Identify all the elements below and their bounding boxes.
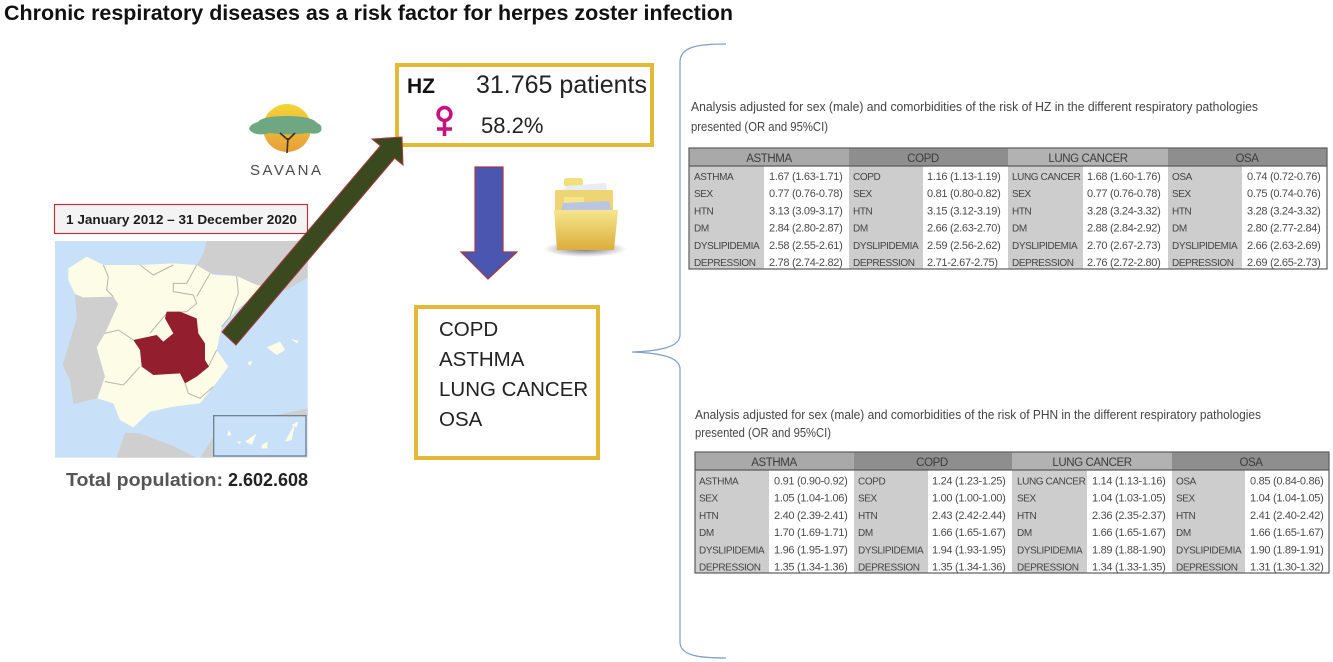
table: HZ risk: 3.28 (3.24-3.32): [1247, 206, 1320, 218]
table: HZ risk: ASTHMA: [694, 172, 734, 183]
table: HZ risk: DEPRESSION: [1172, 258, 1234, 269]
table: HZ risk: 0.75 (0.74-0.76): [1247, 188, 1320, 200]
table: HZ risk: 2.66 (2.63-2.69): [1247, 240, 1320, 252]
table: PHN risk: DYSLIPIDEMIA: [858, 546, 924, 556]
table: PHN risk: [695, 452, 1329, 574]
table: PHN risk: 1.35 (1.34-1.36): [774, 562, 847, 574]
text: total population: [66, 470, 308, 490]
title: Chronic respiratory diseases as a risk factor for herpes zoster infection: [4, 2, 733, 25]
table: PHN risk: 1.66 (1.65-1.67): [932, 527, 1005, 539]
icon: Savana logo: [249, 104, 322, 179]
table: HZ risk: 0.74 (0.72-0.76): [1247, 171, 1320, 183]
icon: Savana logo: SAVANA: [250, 162, 321, 179]
table: PHN risk: DYSLIPIDEMIA: [1176, 546, 1242, 556]
table: PHN risk: 1.66 (1.65-1.67): [1092, 527, 1165, 539]
table: PHN risk: HTN: [699, 511, 719, 522]
table: PHN risk: 2.43 (2.42-2.44): [932, 510, 1005, 522]
table: HZ risk: 0.81 (0.80-0.82): [927, 188, 1000, 200]
table: PHN risk: OSA: [1176, 476, 1197, 488]
text: total population: Total population:: [66, 470, 223, 490]
table: PHN risk: 1.66 (1.65-1.67): [1250, 527, 1323, 539]
table: PHN risk: 1.90 (1.89-1.91): [1250, 544, 1323, 556]
table: HZ risk: ASTHMA: [746, 153, 792, 165]
table: PHN risk: ASTHMA: [751, 457, 797, 469]
table: HZ risk: 3.15 (3.12-3.19): [927, 206, 1000, 218]
table: PHN risk: DM: [858, 528, 873, 539]
table: PHN risk: 1.94 (1.93-1.95): [932, 544, 1005, 556]
table: PHN risk: DYSLIPIDEMIA: [1017, 546, 1083, 556]
table: PHN risk: DM: [699, 528, 714, 539]
table: HZ risk: 1.68 (1.60-1.76): [1087, 171, 1160, 183]
panel: respiratory pathologies: [416, 307, 598, 458]
table: HZ risk: 2.58 (2.55-2.61): [769, 240, 842, 252]
table: HZ risk: 2.84 (2.80-2.87): [769, 222, 842, 234]
table: PHN risk: LUNG CANCER: [1017, 476, 1086, 488]
arrow: map to HZ: [222, 137, 403, 345]
table: HZ risk: DM: [853, 224, 868, 234]
table: PHN risk: COPD: [858, 476, 885, 488]
table: PHN risk: 0.85 (0.84-0.86): [1250, 476, 1323, 488]
table: PHN risk: HTN: [1176, 511, 1196, 522]
table: PHN risk: HTN: [1017, 511, 1037, 522]
table: PHN risk: 1.34 (1.33-1.35): [1092, 562, 1165, 574]
table: HZ risk: DYSLIPIDEMIA: [694, 241, 760, 252]
table: PHN risk: 2.40 (2.39-2.41): [774, 510, 847, 522]
panel: respiratory pathologies: LUNG CANCER: [439, 378, 588, 401]
table: HZ risk: [689, 148, 1327, 269]
table: PHN risk: 1.14 (1.13-1.16): [1092, 476, 1165, 488]
table: PHN risk: SEX: [1017, 494, 1037, 504]
panel: HZ patients: [397, 65, 652, 145]
table: PHN risk: DYSLIPIDEMIA: [699, 546, 765, 556]
table: PHN risk: HTN: [858, 511, 878, 522]
table: PHN risk: 1.31 (1.30-1.32): [1250, 562, 1323, 574]
region: Castilla-La Mancha: [133, 312, 209, 383]
table: HZ risk: 2.69 (2.65-2.73): [1247, 257, 1320, 269]
table: HZ risk: DYSLIPIDEMIA: [1172, 241, 1238, 252]
table: HZ risk: LUNG CANCER: [1048, 153, 1128, 165]
table: PHN risk: 1.04 (1.03-1.05): [1092, 492, 1165, 504]
callout: study period: [54, 204, 308, 234]
table: HZ risk: 0.77 (0.76-0.78): [1087, 188, 1160, 200]
map: Spain with Castilla-La Mancha highlighted: [55, 241, 308, 458]
table: HZ risk: SEX: [1012, 189, 1032, 200]
table: HZ risk: HTN: [1012, 206, 1032, 218]
table: PHN risk: 2.41 (2.40-2.42): [1250, 510, 1323, 522]
text: HZ analysis caption: Analysis adjusted for sex (male) and comorbidities of the risk of HZ in the different respiratory pathologies: [691, 100, 1258, 114]
table: PHN risk: 1.89 (1.88-1.90): [1092, 544, 1165, 556]
table: HZ risk: DEPRESSION: [694, 258, 756, 269]
table: HZ risk: COPD: [853, 172, 880, 183]
table: HZ risk: 2.88 (2.84-2.92): [1087, 222, 1160, 234]
brace: [632, 44, 726, 658]
table: HZ risk: DM: [694, 224, 709, 234]
table: PHN risk: DM: [1017, 528, 1032, 539]
table: HZ risk: DM: [1012, 224, 1027, 234]
table: PHN risk: OSA: [1239, 457, 1263, 469]
table: PHN risk: 1.24 (1.23-1.25): [932, 476, 1005, 488]
callout: study period: 1 January 2012 – 31 December 2020: [66, 212, 297, 227]
table: HZ risk: DEPRESSION: [1012, 258, 1074, 269]
table: HZ risk: HTN: [1172, 206, 1192, 218]
table: HZ risk: SEX: [694, 189, 714, 200]
table: PHN risk: COPD: [916, 457, 948, 469]
table: PHN risk: 0.91 (0.90-0.92): [774, 476, 847, 488]
table: HZ risk: SEX: [853, 189, 873, 200]
table: HZ risk: 2.59 (2.56-2.62): [927, 240, 1000, 252]
table: HZ risk: SEX: [1172, 189, 1192, 200]
table: PHN risk: 1.70 (1.69-1.71): [774, 527, 847, 539]
table: PHN risk: 1.00 (1.00-1.00): [932, 492, 1005, 504]
table: PHN risk: 1.96 (1.95-1.97): [774, 544, 847, 556]
text: PHN analysis caption: Analysis adjusted for sex (male) and comorbidities of the risk of PHN in the different respiratory pathologies: [695, 408, 1261, 422]
table: HZ risk: 0.77 (0.76-0.78): [769, 188, 842, 200]
table: PHN risk: 1.05 (1.04-1.06): [774, 492, 847, 504]
table: HZ risk: 2.70 (2.67-2.73): [1087, 240, 1160, 252]
table: HZ risk: HTN: [694, 206, 714, 218]
table: HZ risk: 1.16 (1.13-1.19): [927, 171, 1000, 183]
table: PHN risk: ASTHMA: [699, 476, 739, 488]
text: PHN analysis caption: presented (OR and 95%CI): [695, 426, 831, 440]
table: HZ risk: DYSLIPIDEMIA: [1012, 241, 1078, 252]
icon: folder: [543, 178, 627, 257]
arrow: HZ to pathologies: [461, 167, 517, 279]
text: total population: 2.602.608: [228, 470, 308, 490]
panel: HZ patients: 31.765 patients: [476, 71, 647, 99]
panel: respiratory pathologies: COPD: [439, 318, 498, 341]
table: HZ risk: 2.66 (2.63-2.70): [927, 222, 1000, 234]
table: HZ risk: DYSLIPIDEMIA: [853, 241, 919, 252]
table: HZ risk: 3.13 (3.09-3.17): [769, 206, 842, 218]
table: HZ risk: OSA: [1172, 172, 1193, 183]
panel: respiratory pathologies: OSA: [439, 408, 483, 431]
table: HZ risk: COPD: [907, 153, 939, 165]
table: PHN risk: SEX: [1176, 494, 1196, 504]
icon: female symbol: [437, 108, 452, 136]
table: PHN risk: LUNG CANCER: [1052, 457, 1132, 469]
table: HZ risk: 2.80 (2.77-2.84): [1247, 222, 1320, 234]
table: PHN risk: 1.35 (1.34-1.36): [932, 562, 1005, 574]
table: PHN risk: DM: [1176, 528, 1191, 539]
table: HZ risk: 3.28 (3.24-3.32): [1087, 206, 1160, 218]
table: PHN risk: DEPRESSION: [699, 562, 761, 574]
text: HZ analysis caption: presented (OR and 95%CI): [691, 120, 828, 134]
table: HZ risk: 2.78 (2.74-2.82): [769, 257, 842, 269]
panel: respiratory pathologies: ASTHMA: [439, 348, 525, 371]
table: HZ risk: DEPRESSION: [853, 258, 915, 269]
panel: HZ patients: HZ: [407, 75, 435, 98]
panel: HZ patients: 58.2%: [481, 113, 543, 138]
table: PHN risk: SEX: [699, 494, 719, 504]
table: PHN risk: DEPRESSION: [1017, 562, 1079, 574]
table: PHN risk: SEX: [858, 494, 878, 504]
table: PHN risk: DEPRESSION: [858, 562, 920, 574]
table: PHN risk: DEPRESSION: [1176, 562, 1238, 574]
table: HZ risk: HTN: [853, 206, 873, 218]
table: HZ risk: 1.67 (1.63-1.71): [769, 171, 842, 183]
table: HZ risk: LUNG CANCER: [1012, 172, 1081, 183]
table: HZ risk: DM: [1172, 224, 1187, 234]
table: PHN risk: 2.36 (2.35-2.37): [1092, 510, 1165, 522]
table: PHN risk: 1.04 (1.04-1.05): [1250, 492, 1323, 504]
table: HZ risk: 2.76 (2.72-2.80): [1087, 257, 1160, 269]
table: HZ risk: OSA: [1235, 153, 1259, 165]
table: HZ risk: 2.71-2.67-2.75): [927, 257, 998, 269]
